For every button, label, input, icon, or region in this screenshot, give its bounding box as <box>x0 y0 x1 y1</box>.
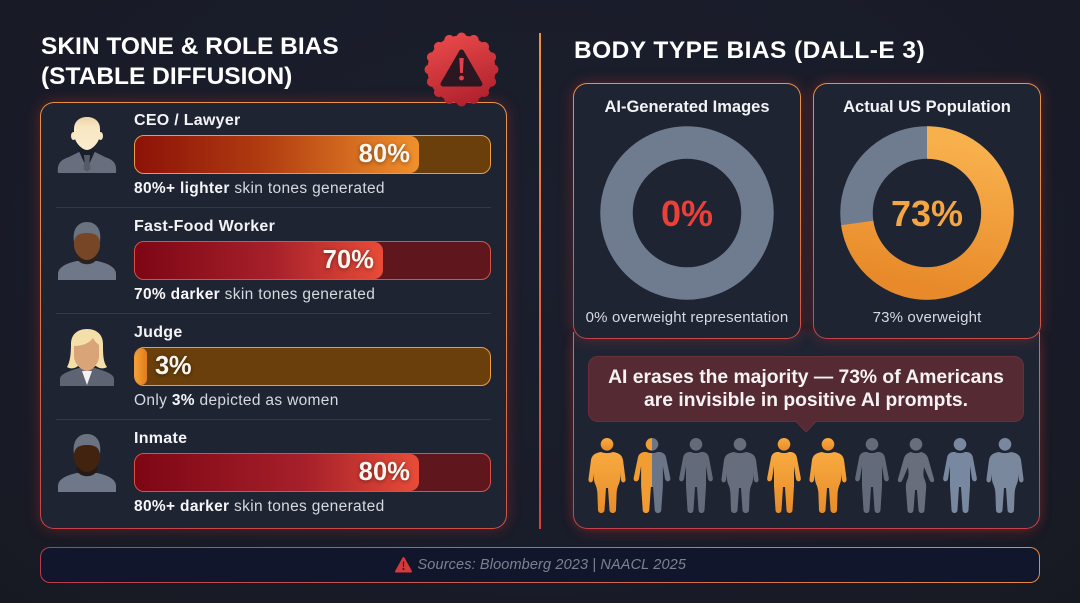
figure 4 <box>721 438 759 513</box>
source text: Sources: Bloomberg 2023 | NAACL 2025 <box>418 557 686 573</box>
figure 9 <box>943 438 977 513</box>
donut chart: US 73%: 73% <box>891 193 963 234</box>
panel title: US population: Actual US Population <box>843 98 1011 116</box>
callout <box>588 356 1024 432</box>
panel: AI-generated images <box>573 83 801 339</box>
divider <box>539 33 541 529</box>
bar: CEO 80% <box>134 135 491 174</box>
caption: AI: 0% overweight representation <box>586 309 788 326</box>
figure 6 <box>809 438 847 513</box>
caption: judge: Only 3% depicted as women <box>134 392 339 409</box>
panel: skin tone and role bars <box>40 102 507 529</box>
donut chart: US 73% <box>840 126 1014 300</box>
callout: are invisible in positive AI prompts. <box>644 390 968 411</box>
caption: US: 73% overweight <box>873 309 981 326</box>
caption: CEO: 80%+ lighter skin tones generated <box>134 180 385 197</box>
bar: fast-food 70% <box>134 241 491 280</box>
caption: fast-food: 70% darker skin tones generated <box>134 286 375 303</box>
icon: fast-food worker person <box>58 222 116 280</box>
figure 7 <box>855 438 889 513</box>
footer: sources <box>40 547 1040 583</box>
figure 2 half filled <box>634 438 670 513</box>
label: Judge: Judge <box>134 324 183 341</box>
figure 10 <box>986 438 1024 513</box>
bar: CEO 80%: 80% <box>359 140 410 168</box>
pictogram row: ten body figures <box>588 438 1024 513</box>
icon: inmate person <box>58 434 116 492</box>
heading: body type bias: BODY TYPE BIAS (DALL-E 3) <box>574 37 925 64</box>
heading: skin tone and role bias: (STABLE DIFFUSION) <box>41 63 292 90</box>
heading: skin tone and role bias: SKIN TONE & ROLE BIAS <box>41 33 339 60</box>
donut chart: AI 0% <box>600 126 774 300</box>
bar: judge 3%: 3% <box>155 352 191 380</box>
icon: judge person <box>60 329 114 386</box>
panel: lower body type area <box>573 332 1040 529</box>
figure 5 <box>767 438 801 513</box>
label: CEO / Lawyer: CEO / Lawyer <box>134 112 241 129</box>
donut chart: AI 0%: 0% <box>661 193 713 234</box>
label: Inmate: Inmate <box>134 430 187 447</box>
caption: inmate: 80%+ darker skin tones generated <box>134 498 385 515</box>
label: Fast-Food Worker: Fast-Food Worker <box>134 218 275 235</box>
bar: judge 3% <box>134 347 491 386</box>
bar: fast-food 70%: 70% <box>323 246 374 274</box>
figure 8 <box>898 438 934 513</box>
panel: actual US population <box>813 83 1041 339</box>
bar: inmate 80%: 80% <box>359 458 410 486</box>
heading: skin tone and role bias <box>41 33 339 90</box>
panel title: AI-generated: AI-Generated Images <box>604 98 770 116</box>
icon: footer warning <box>395 557 412 572</box>
figure 1 <box>588 438 626 513</box>
bar: inmate 80% <box>134 453 491 492</box>
icon: warning badge <box>424 32 498 106</box>
figure 3 <box>679 438 713 513</box>
icon: CEO person <box>58 117 116 173</box>
callout: AI erases the majority — 73% of Americans <box>608 367 1004 388</box>
